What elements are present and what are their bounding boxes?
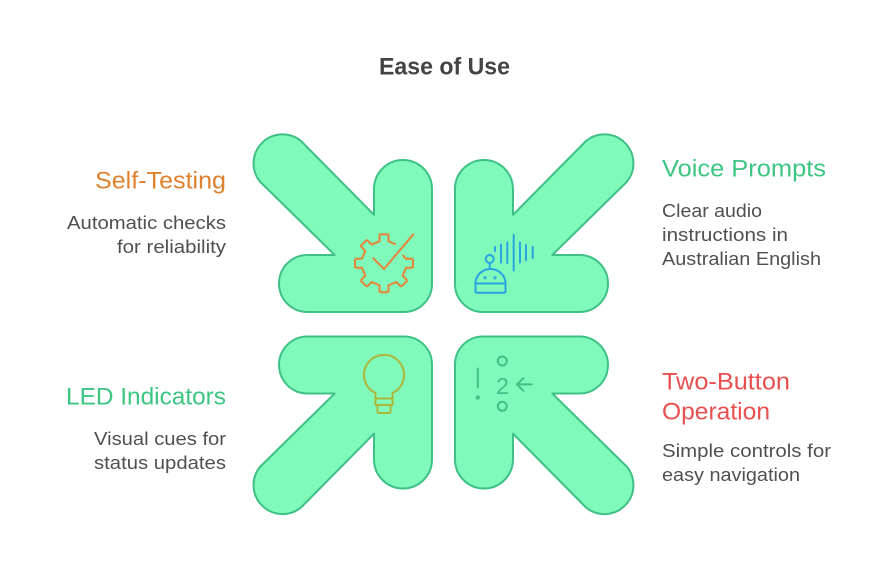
description: two-button operation: Simple controls for (662, 441, 831, 461)
title: Ease of Use (379, 54, 510, 80)
description: self-testing: Automatic checks (67, 213, 226, 233)
description: voice prompts (662, 201, 821, 269)
description: voice prompts: instructions in (662, 225, 788, 245)
description: self-testing: for reliability (117, 237, 226, 257)
arrow: pointing top-right (254, 336, 432, 514)
panel: self-testing (67, 134, 432, 312)
description: self-testing (67, 213, 226, 257)
description: voice prompts: Australian English (662, 249, 821, 269)
arrow: pointing bottom-left (455, 134, 633, 312)
icon: gear with check mark (355, 234, 413, 292)
icon: exclamation, digit two, circles and arrow (476, 356, 532, 411)
description: LED indicators: status updates (94, 453, 226, 473)
panel: two-button operation (455, 336, 831, 514)
description: two-button operation: easy navigation (662, 465, 800, 485)
description: two-button operation (662, 441, 831, 485)
heading: Two-Button Operation: Two-Button (662, 368, 790, 396)
icon: exclamation, digit two, circles and arrow: 2 (496, 373, 509, 399)
description: LED indicators: Visual cues for (94, 429, 226, 449)
panel: LED indicators (66, 336, 432, 514)
description: LED indicators (94, 429, 226, 473)
icon: robot with sound waves (476, 235, 533, 293)
panel: voice prompts (455, 134, 826, 312)
arrow: pointing bottom-right (254, 134, 432, 312)
heading: Two-Button Operation (662, 368, 790, 426)
icon: light bulb (364, 355, 404, 413)
heading: Two-Button Operation: Operation (662, 398, 770, 426)
description: voice prompts: Clear audio (662, 201, 762, 221)
heading: Voice Prompts: Voice Prompts (662, 156, 826, 182)
arrow: pointing top-left (455, 336, 633, 514)
heading: Self-Testing: Self-Testing (95, 168, 226, 194)
heading: LED Indicators: LED Indicators (66, 384, 226, 410)
